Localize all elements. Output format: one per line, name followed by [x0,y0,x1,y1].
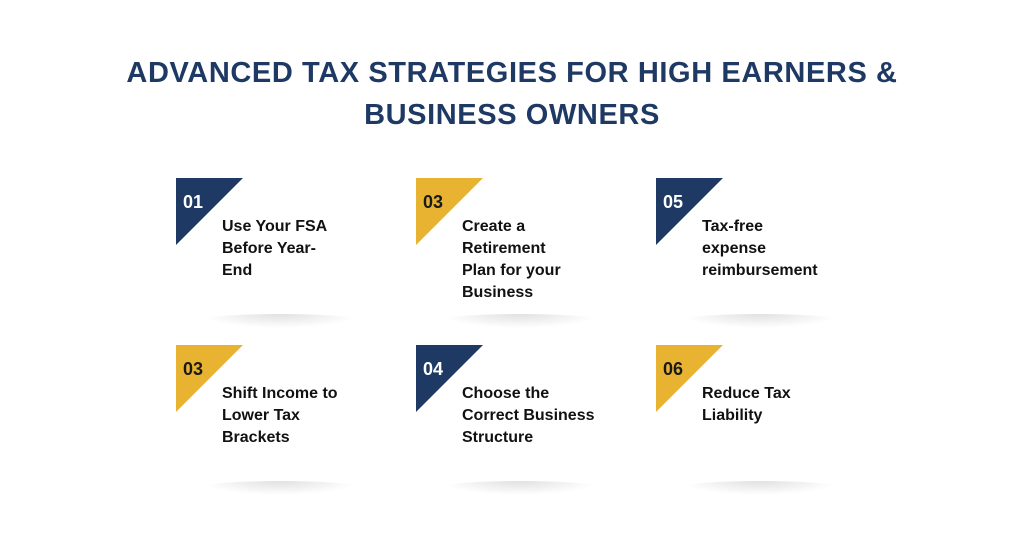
card 03 retirement: Retirement [462,240,546,257]
card 03 retirement: Plan for your [462,262,561,279]
card 04: Correct Business [462,407,594,424]
card 04 [416,345,594,491]
card 04: Structure [462,429,533,446]
title: BUSINESS OWNERS [364,99,660,131]
card 03 shift income: 03 [183,359,203,379]
card 05: reimbursement [702,262,818,279]
card 03 shift income: Shift Income to [222,385,338,402]
card 01: Use Your FSA [222,218,327,235]
title: ADVANCED TAX STRATEGIES FOR HIGH EARNERS & [126,57,898,89]
card 05: expense [702,240,766,257]
card 05 [656,178,818,324]
card 03 shift income [176,345,338,491]
card 05: Tax-free [702,218,763,235]
title [126,57,898,131]
card 05: 05 [663,192,683,212]
card 06: Liability [702,407,762,424]
card 03 retirement: Create a [462,218,525,235]
card 03 shift income: Lower Tax [222,407,300,424]
card 04: Choose the [462,385,549,402]
card 06: 06 [663,359,683,379]
card 01 [176,178,336,324]
card 03 retirement: 03 [423,192,443,212]
card 03 shift income: Brackets [222,429,290,446]
card 01: Before Year- [222,240,316,257]
card 03 retirement: Business [462,284,533,301]
card 04: 04 [423,359,443,379]
card 01: 01 [183,192,203,212]
card 06: Reduce Tax [702,385,791,402]
card 01: End [222,262,252,279]
card 06 [656,345,816,491]
card 03 retirement [416,178,576,324]
